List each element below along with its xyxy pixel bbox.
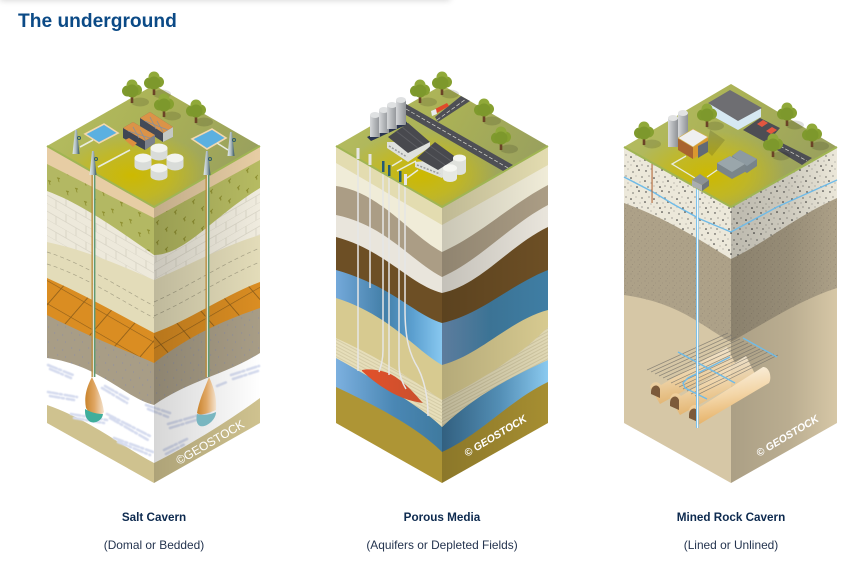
salt cavities [85, 377, 216, 426]
block: salt cavern [47, 72, 260, 483]
right face strata [146, 146, 260, 483]
right face strata [731, 147, 837, 483]
right face strata [442, 146, 548, 483]
silos [668, 110, 688, 147]
left face strata [47, 146, 154, 483]
ponds [85, 124, 226, 149]
trees [122, 72, 213, 126]
warehouses [387, 123, 457, 178]
caption: mined rock cavern [677, 511, 785, 552]
ground surface [624, 84, 837, 207]
wells [358, 160, 428, 416]
trees [634, 102, 829, 160]
parking and road [743, 118, 812, 165]
caption: porous media: (Aquifers or Depleted Fields) [366, 538, 518, 552]
block: mined rock cavern [624, 84, 837, 483]
surface pipes [672, 156, 720, 178]
truck [431, 103, 449, 116]
roads [406, 96, 513, 171]
hangars [717, 150, 757, 179]
ground surface [336, 85, 548, 207]
pipes and small tanks [392, 154, 466, 182]
ground surface [47, 85, 260, 207]
trees [410, 72, 518, 154]
surface pipes [80, 140, 228, 167]
main shaft [696, 186, 699, 428]
caption: salt cavern: (Domal or Bedded) [104, 538, 204, 552]
caption: porous media: Porous Media [404, 511, 480, 524]
left face strata [336, 146, 442, 483]
wellheads [72, 130, 236, 175]
well pipes [92, 172, 209, 377]
caption: salt cavern [104, 511, 204, 552]
storage tanks [134, 144, 184, 180]
block: porous media [336, 72, 548, 483]
orange probe [652, 158, 653, 203]
control building [678, 129, 725, 159]
oil reservoir [362, 369, 423, 403]
tunnels [650, 347, 770, 425]
blue service lines [624, 177, 837, 399]
caption: salt cavern: Salt Cavern [122, 511, 186, 524]
tunnel grid [647, 333, 778, 396]
caption: mined rock cavern: (Lined or Unlined) [684, 538, 778, 552]
silos [367, 97, 408, 141]
title: The underground [18, 11, 177, 32]
left face strata [624, 147, 731, 483]
watermark: © GEOSTOCK [754, 412, 822, 460]
wellheads [356, 148, 407, 185]
warehouse [707, 90, 762, 130]
watermark: ©GEOSTOCK [174, 417, 247, 468]
shaft head box [692, 174, 709, 191]
caption: mined rock cavern: Mined Rock Cavern [677, 511, 785, 524]
caption: porous media [366, 511, 518, 552]
battery buildings [123, 112, 173, 150]
watermark: © GEOSTOCK [462, 412, 530, 460]
